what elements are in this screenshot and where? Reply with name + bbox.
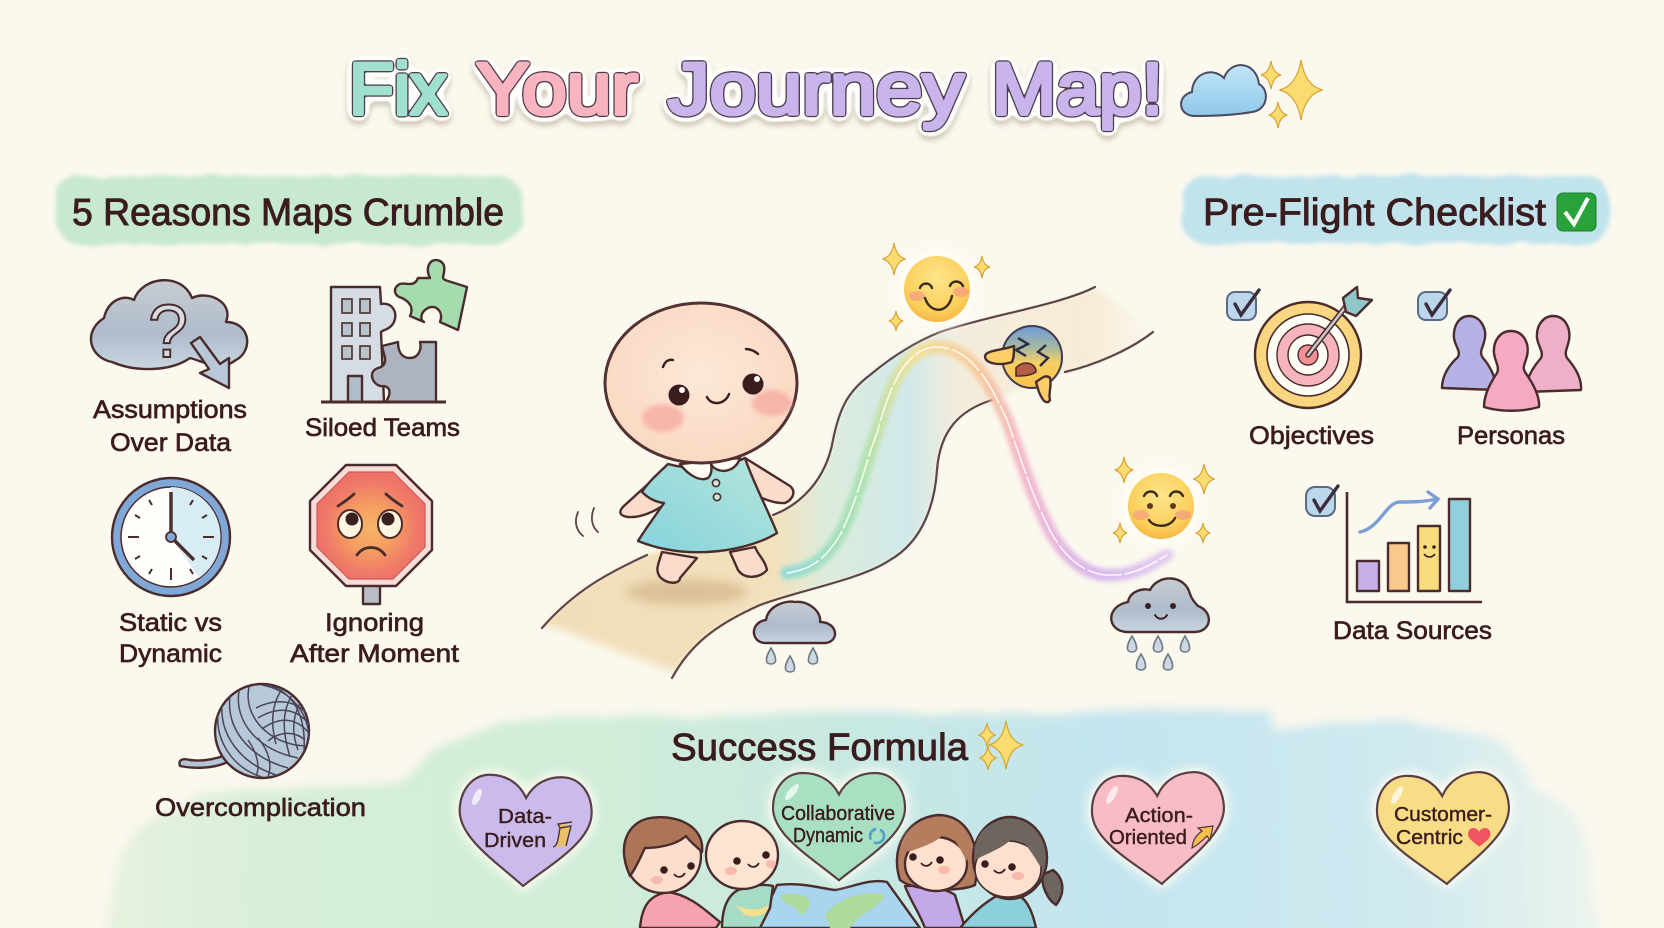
illustration: baby character	[576, 303, 797, 605]
heart: customer-centric: Centric	[1396, 827, 1463, 849]
checklist: personas	[1418, 290, 1581, 450]
reason: static vs dynamic clock: Dynamic	[119, 640, 222, 668]
panel: 5 reasons header: 5 Reasons Maps Crumble	[72, 192, 504, 234]
small baby	[722, 885, 773, 928]
title	[349, 49, 1163, 130]
title: Fix	[349, 49, 447, 130]
panel: 5 reasons header	[56, 176, 522, 244]
girl blue	[1042, 870, 1062, 905]
reason: assumptions over data	[91, 280, 247, 457]
icon: smiling rain cloud	[1111, 578, 1209, 670]
title: Your	[476, 49, 638, 130]
heart: customer-centric: Customer-	[1394, 804, 1492, 826]
girl purple	[905, 886, 965, 928]
panel: pre-flight header	[1182, 176, 1610, 244]
reason: siloed teams	[305, 260, 467, 442]
heart: data-driven: Data-	[498, 806, 552, 828]
heart: action-oriented	[1090, 771, 1228, 887]
title: Map!	[992, 49, 1163, 130]
reason: ignoring after moment stop sign: After Moment	[290, 640, 459, 668]
heart: collaborative dynamic: Dynamic	[793, 825, 863, 847]
checklist: personas: Personas	[1457, 422, 1565, 450]
panel: pre-flight header: Pre-Flight Checklist	[1203, 192, 1546, 234]
reason: overcomplication yarn	[155, 684, 366, 822]
reason: assumptions over data: Over Data	[110, 429, 231, 457]
reason: ignoring after moment stop sign	[290, 465, 459, 668]
heart: collaborative dynamic	[773, 773, 905, 880]
illustration: winding journey road	[540, 287, 1167, 692]
panel: success formula wash	[105, 713, 1600, 928]
heading: success formula: Success Formula	[671, 727, 969, 769]
icon: small rain cloud	[754, 602, 835, 672]
heart: customer-centric	[1375, 771, 1513, 887]
reason: assumptions over data: Assumptions	[93, 396, 247, 424]
emoji: scared face on drop	[985, 326, 1062, 402]
reason: static vs dynamic clock	[112, 478, 230, 668]
illustration: children holding world map	[624, 815, 1062, 928]
map	[757, 881, 920, 928]
icon: title cloud and sparkles	[1181, 60, 1323, 128]
checklist: objectives	[1227, 287, 1374, 450]
reason: assumptions over data: ?	[148, 289, 188, 373]
heart: data-driven	[457, 774, 593, 888]
reason: static vs dynamic clock: Static vs	[119, 609, 222, 637]
heart: action-oriented: Oriented	[1109, 827, 1187, 849]
rainbow journey curve	[787, 347, 1167, 575]
reason: siloed teams: Siloed Teams	[305, 414, 460, 442]
checklist: data sources: Data Sources	[1333, 617, 1492, 645]
checklist: objectives: Objectives	[1249, 422, 1374, 450]
emoji: happy face on peak	[882, 243, 990, 331]
title: Journey	[668, 49, 965, 130]
heart: collaborative dynamic: Collaborative	[781, 803, 895, 825]
reason: ignoring after moment stop sign: Ignoring	[325, 609, 424, 637]
boy	[640, 892, 720, 928]
emoji: smiling face in valley	[1113, 457, 1215, 546]
heart: data-driven: Driven	[484, 830, 546, 852]
heart: action-oriented: Action-	[1125, 805, 1193, 827]
reason: overcomplication yarn: Overcomplication	[155, 794, 366, 822]
checklist: data sources	[1306, 486, 1492, 645]
